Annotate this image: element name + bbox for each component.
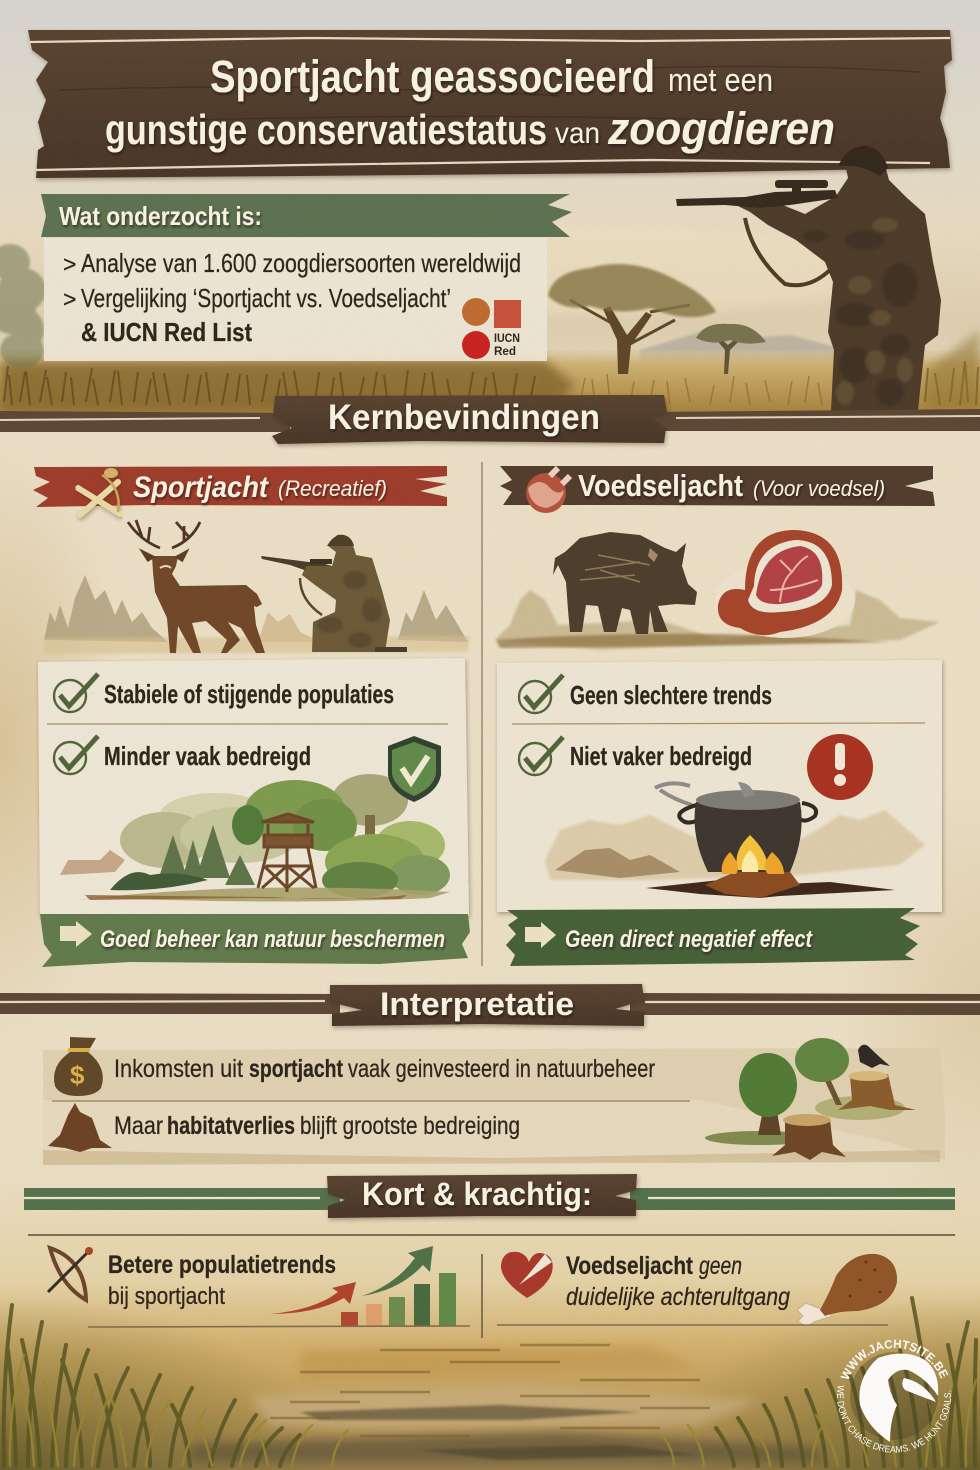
text: betere populatietrends: [108, 1251, 336, 1310]
bullet 2: [63, 283, 451, 347]
text: voedseljacht geen: [566, 1252, 790, 1311]
finding 2: [519, 737, 752, 775]
body: [738, 147, 941, 411]
panel: Interpretatie: [43, 1037, 945, 1165]
text: inkomsten: sportjacht: [249, 1055, 344, 1083]
acacia tree small: [696, 324, 766, 374]
section header: Kort & krachtig: [24, 1174, 955, 1218]
logo: jachtsite.be: [837, 1340, 952, 1453]
text: habitatverlies: habitatverlies: [167, 1112, 295, 1140]
deer: [128, 520, 265, 653]
banner: Voedseljacht: (Voor voedsel): [753, 476, 885, 501]
section header: Interpretatie: [0, 984, 980, 1026]
text: voedseljacht geen: duidelijke achterultgang: [566, 1283, 790, 1311]
kneeling hunter: [261, 535, 407, 652]
summary: betere populatietrends: [48, 1246, 470, 1327]
card: Voedseljacht findings: [497, 660, 942, 966]
finding 2: Niet vaker bedreigd: [570, 741, 752, 771]
icon: check 1: [54, 674, 98, 712]
acacia tree large: [548, 264, 716, 374]
panel: Sportjacht: [33, 466, 470, 967]
banner: Goed beheer kan natuur beschermen: [40, 914, 470, 967]
chart: rising bars with arrows: [88, 1246, 470, 1327]
icon: check 2: [519, 737, 563, 775]
banner: Sportjacht: Sportjacht: [133, 471, 270, 504]
section header: Interpretatie: Interpretatie: [380, 986, 574, 1022]
meat steak: [715, 530, 855, 638]
icon: bow: [48, 1247, 93, 1300]
text: betere populatietrends: bij sportjacht: [108, 1283, 225, 1310]
grass blades: [4, 1298, 976, 1466]
circular slogan text: WWW.JACHTSITE.BE: [840, 1340, 948, 1379]
title line 2: [105, 103, 835, 154]
camouflage patches: [802, 230, 918, 406]
finding 1: [54, 674, 394, 712]
banner: Sportjacht: [33, 466, 447, 507]
icon: IUCN logo: IUCN: [494, 331, 520, 345]
ibex head mark: [859, 1353, 938, 1442]
icon: meat: [526, 468, 570, 513]
text: voedseljacht geen: Voedseljacht: [566, 1252, 694, 1280]
banner: wat onderzocht is: Wat onderzocht is:: [59, 201, 262, 231]
text: inkomsten: Inkomsten uit: [114, 1055, 243, 1083]
circular slogan text: [837, 1340, 952, 1453]
icon: check 1: [519, 675, 563, 713]
scene: deer and kneeling hunter: [44, 520, 470, 654]
cooking pot: [655, 782, 816, 872]
scene: trees and stumps with bird: [705, 1038, 916, 1160]
banner: Voedseljacht: [500, 466, 935, 506]
section header: Kort & krachtig: Kort & krachtig:: [362, 1176, 592, 1212]
icon: alert: [807, 734, 873, 800]
section header: Kernbevindingen: Kernbevindingen: [328, 398, 600, 437]
banner: Geen direct negatief effect: [506, 908, 920, 966]
icon: money bag: $: [70, 1060, 85, 1090]
title line 2: gunstige conservatiestatus: [105, 106, 547, 153]
title line 2: van: [555, 117, 600, 150]
icon: check 2: [54, 736, 98, 774]
text: voedseljacht geen: geen: [699, 1252, 742, 1280]
bullet 2: Vergelijking ‘Sportjacht vs. Voedseljacht’: [81, 283, 451, 313]
icon: shield: [388, 736, 441, 802]
banner: wat onderzocht is: [41, 194, 572, 237]
circular slogan text: WE DON'T CHASE DREAMS. WE HUNT GOALS.: [837, 1386, 952, 1453]
banner: Sportjacht: (Recreatief): [278, 476, 387, 501]
icon: chicken drumstick: [797, 1254, 897, 1327]
scene: boar and meat: [495, 530, 940, 650]
column divider: [481, 462, 483, 966]
savanna landscape: [0, 244, 980, 416]
text: habitatverlies: blijft grootste bedreiging: [300, 1112, 520, 1140]
left shrubs: [0, 244, 46, 368]
text: inkomsten: vaak geinvesteerd in natuurbeheer: [348, 1055, 655, 1083]
scene: forest and hunting tower: [60, 736, 450, 902]
bird: [858, 1045, 890, 1068]
bullet 1: >: [63, 251, 76, 277]
card: Sportjacht findings: [38, 658, 470, 967]
text: habitatverlies: Maar: [114, 1112, 163, 1140]
text: betere populatietrends: Betere populatietrends: [108, 1251, 336, 1279]
icon: crossbow: [78, 468, 120, 515]
panel: Voedseljacht: [495, 466, 942, 966]
text: inkomsten: [114, 1055, 655, 1083]
title line 1: met een: [668, 62, 773, 98]
icon: IUCN logo: Red: [494, 344, 516, 358]
scene: pot over campfire: [545, 782, 925, 898]
background trees: [44, 575, 468, 642]
fire: [646, 835, 895, 898]
banner: Goed beheer kan natuur beschermen: Goed beheer kan natuur beschermen: [100, 926, 445, 953]
hunter silhouette with rifle: [676, 146, 941, 411]
title line 2: zoogdieren: [607, 103, 835, 154]
hunting tower: [258, 814, 316, 892]
sling: [745, 218, 832, 285]
finding 1: [519, 675, 772, 713]
banner: Geen direct negatief effect: Geen direct negatief effect: [565, 926, 813, 953]
bullet 1: Analyse van 1.600 zoogdiersoorten wereldwijd: [81, 248, 521, 278]
banner: Voedseljacht: Voedseljacht: [578, 468, 743, 503]
bullet 2: & IUCN Red List: [81, 317, 252, 347]
icon: IUCN logo: [462, 298, 521, 359]
panel body: [44, 238, 547, 361]
title line 1: Sportjacht geassocieerd: [210, 51, 655, 102]
cap: [838, 146, 888, 176]
parchment base under landscape: [0, 428, 980, 436]
finding 1: Stabiele of stijgende populaties: [104, 679, 394, 709]
icon: heart meat: [501, 1252, 553, 1298]
bullet 2: >: [63, 286, 76, 312]
finding 2: Minder vaak bedreigd: [104, 741, 311, 771]
finding 2: [54, 736, 311, 774]
title board: [28, 30, 952, 178]
panel: wat onderzocht is: [41, 194, 572, 361]
rifle: [676, 180, 838, 208]
summary: voedseljacht geen achterultgang: [497, 1252, 897, 1327]
section header: Kernbevindingen: [0, 395, 980, 444]
bottom ground and grass: [0, 1295, 980, 1470]
icon: money bag: [54, 1037, 103, 1096]
icon: tree stump: [48, 1103, 112, 1152]
text: habitatverlies: [114, 1112, 520, 1140]
boar: [553, 532, 697, 634]
finding 1: Geen slechtere trends: [570, 680, 772, 710]
